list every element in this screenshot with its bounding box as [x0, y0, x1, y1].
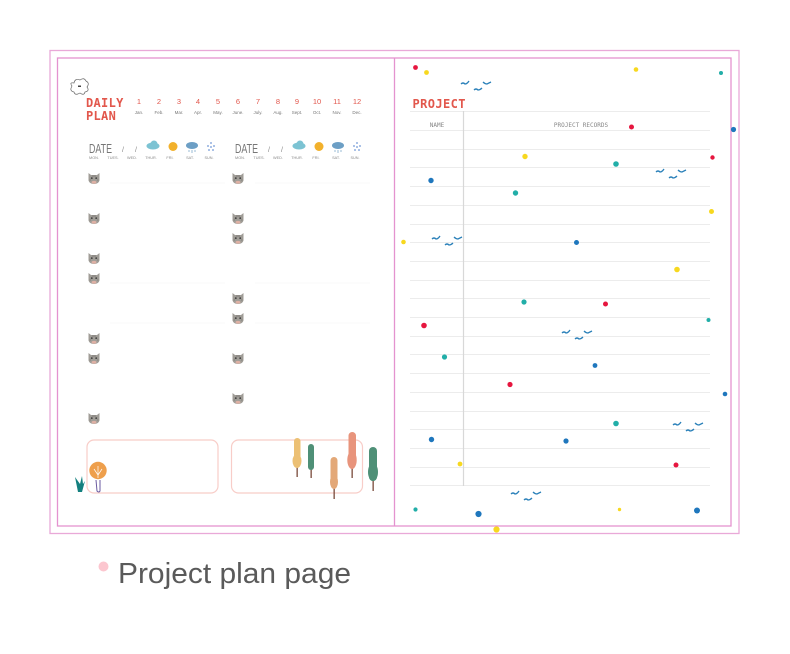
month name row: Feb.	[154, 110, 164, 115]
month number row: 7	[256, 97, 260, 106]
spine divider	[394, 58, 396, 526]
date header right: /	[281, 147, 283, 154]
icon: flower outline	[71, 79, 88, 94]
month number row: 11	[333, 97, 341, 106]
date header right: MON.	[235, 156, 245, 160]
heading: daily plan: PLAN	[86, 109, 116, 123]
notebook outer frame	[50, 50, 739, 534]
date header right: TUES.	[253, 156, 265, 160]
date header left: DATE	[89, 142, 112, 156]
date header right: /	[268, 147, 270, 154]
date header right: WED.	[273, 156, 283, 160]
faint writing lines	[110, 183, 370, 323]
icon: birds top	[461, 81, 491, 90]
date header left	[89, 140, 215, 160]
month name row	[135, 110, 362, 115]
month name row: Nov.	[333, 110, 341, 115]
date header left: SUN.	[204, 156, 214, 160]
table header: project records: PROJECT RECORDS	[554, 122, 608, 129]
month number row: 3	[177, 97, 181, 106]
month name row: Sept.	[292, 110, 302, 115]
month name row: June.	[232, 110, 244, 115]
heading: daily plan	[86, 96, 124, 123]
date header right: DATE	[235, 142, 258, 156]
caption: project plan page: Project plan page	[118, 558, 351, 590]
icon: birds center	[562, 330, 592, 339]
date header right: THUR.	[291, 156, 303, 160]
panel: project page	[401, 65, 736, 533]
panel: daily plan page	[71, 79, 378, 499]
note box right	[232, 440, 362, 493]
date header right: SUN.	[350, 156, 360, 160]
icon: tree group	[292, 432, 378, 499]
icon: birds upper right	[656, 169, 686, 178]
month name row: Aug.	[273, 110, 283, 115]
month number row: 2	[157, 97, 161, 106]
icon: grass	[75, 476, 85, 492]
date header left: MON.	[89, 156, 99, 160]
month name row: Mar.	[175, 110, 183, 115]
month number row: 4	[196, 97, 200, 106]
month number row: 1	[137, 97, 141, 106]
project table	[410, 111, 710, 486]
month number row: 9	[295, 97, 299, 106]
notebook inner frame	[58, 58, 731, 526]
date header left: FRI.	[166, 156, 174, 160]
month number row	[137, 97, 361, 106]
month number row: 12	[353, 97, 361, 106]
heading: daily plan: DAILY	[86, 96, 124, 110]
note box left	[87, 440, 218, 493]
date header left: THUR.	[145, 156, 157, 160]
month number row: 5	[216, 97, 220, 106]
date header right: SAT.	[332, 156, 340, 160]
date header right: FRI.	[312, 156, 320, 160]
icon: birds bottom	[511, 491, 541, 500]
icon: orange round tree	[89, 462, 107, 492]
month number row: 8	[276, 97, 280, 106]
month name row: Jan.	[135, 110, 143, 115]
cat icons right column	[232, 173, 244, 404]
month name row: Dec.	[352, 110, 362, 115]
month name row: July.	[254, 110, 262, 115]
heading: project: PROJECT	[412, 97, 466, 111]
date header left: /	[122, 147, 124, 154]
date header left: /	[135, 147, 137, 154]
date header left: SAT.	[186, 156, 194, 160]
month number row: 6	[236, 97, 240, 106]
confetti dots	[401, 65, 736, 533]
date header right	[235, 140, 361, 160]
date header left: TUES.	[107, 156, 119, 160]
icon: birds left middle	[432, 236, 462, 245]
caption bullet	[98, 562, 108, 572]
cat icons left column	[88, 173, 100, 424]
icon: birds lower right	[673, 422, 703, 431]
month name row: Oct.	[313, 110, 321, 115]
date header left: WED.	[127, 156, 137, 160]
month name row: May.	[213, 110, 223, 115]
month name row: Apr.	[194, 110, 202, 115]
month number row: 10	[313, 97, 321, 106]
table header: name: NAME	[430, 122, 445, 129]
